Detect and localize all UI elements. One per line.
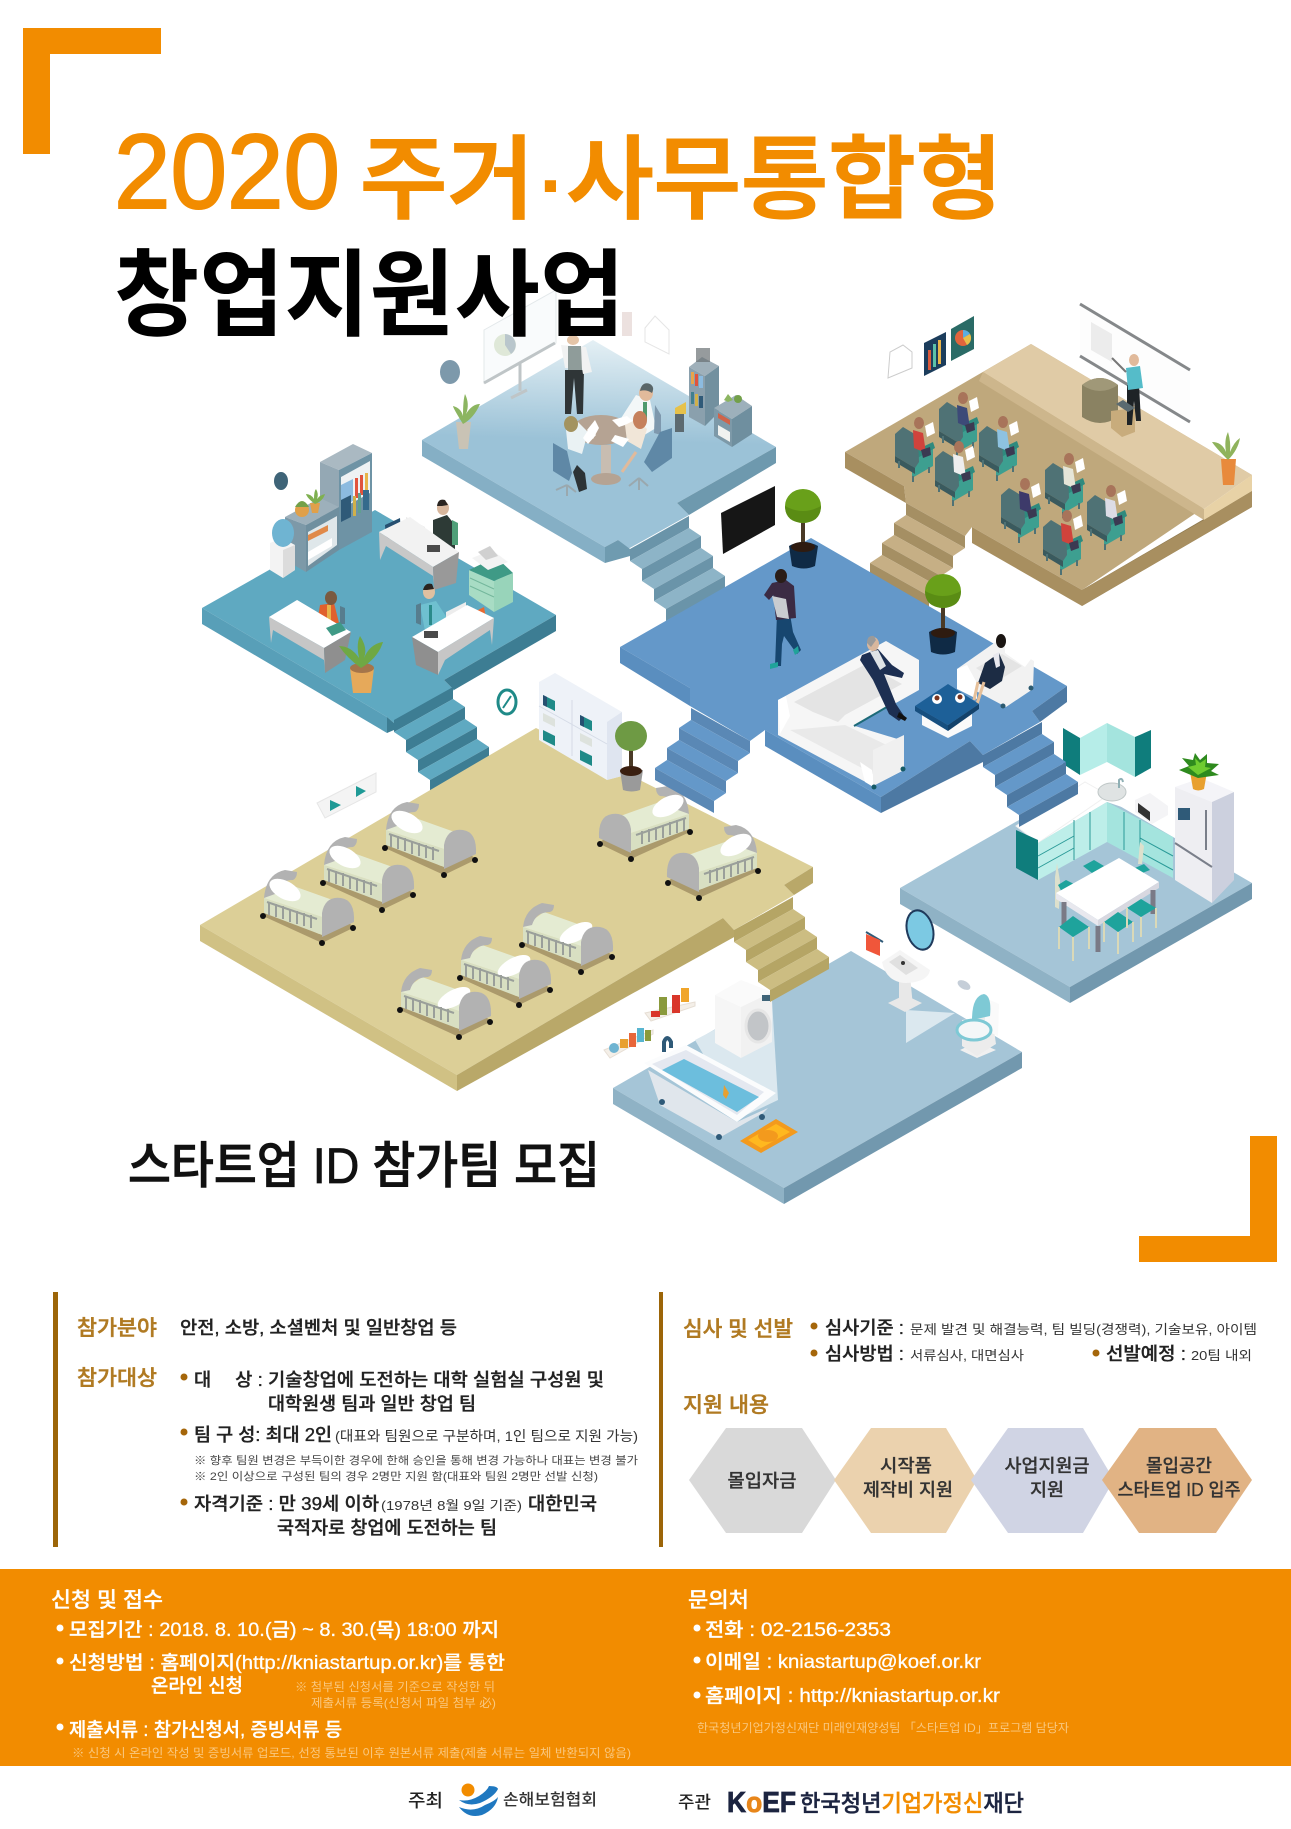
- microwave: [1135, 793, 1168, 824]
- room: meeting room: [422, 290, 776, 563]
- pale floor tiles: [695, 1000, 955, 1118]
- left desk with worker: [269, 591, 351, 673]
- icon: compass clock: [498, 690, 516, 714]
- hexagon: space: 몰입공간: [1146, 1456, 1212, 1476]
- text: criteria: 문제 발견 및 해결능력, 팀 빌딩(경쟁력), 기술보유, 아이템: [910, 1322, 1257, 1337]
- bullet: homepage: [694, 1692, 700, 1698]
- bullet: phone: [694, 1624, 700, 1632]
- hexagon: business grant: [971, 1428, 1114, 1533]
- text: selection: 20팀 내외: [1191, 1348, 1252, 1363]
- room: bathroom: [604, 907, 1022, 1204]
- sofa: [778, 641, 919, 790]
- text: qualification line 2: 국적자로 창업에 도전하는 팀: [277, 1518, 497, 1538]
- upper cabinets: [1063, 723, 1151, 777]
- stairs: dormitory to bathroom: [734, 897, 829, 1002]
- right desk with worker: [412, 584, 494, 675]
- panel: eligibility: [53, 1292, 638, 1547]
- tree back: [785, 489, 821, 568]
- panel: application band: [0, 1569, 1291, 1766]
- room: lounge: [620, 489, 1067, 813]
- room: kitchen: [900, 723, 1252, 1003]
- text: foundation name: 한국청년기업가정신재단: [800, 1790, 1024, 1816]
- dorm tree: [615, 721, 647, 792]
- text: documents: 제출서류 : 참가신청서, 증빙서류 등: [69, 1719, 342, 1741]
- man on sofa: [860, 636, 907, 721]
- whiteboard: [484, 290, 556, 398]
- coffee table: [915, 684, 979, 738]
- hexagon: funding: [689, 1428, 836, 1533]
- title line 1: [114, 113, 1003, 231]
- note 1: ※ 향후 팀원 변경은 부득이한 경우에 한해 승인을 통해 변경 가능하나 대표는 변경 불가: [194, 1453, 638, 1467]
- heading: target: 참가대상: [77, 1367, 157, 1390]
- title line 2: 창업지원사업: [114, 243, 625, 349]
- hexagon: business grant: 사업지원금: [1004, 1456, 1090, 1476]
- illustration: isometric floors: [200, 290, 1252, 1204]
- stairs: lounge to kitchen: [983, 722, 1078, 827]
- note: attachment line 2: 제출서류 등록(신청서 파일 첨부 必): [311, 1696, 496, 1710]
- lectern and presenter: [1082, 354, 1143, 437]
- bullet: qualification: [180, 1498, 188, 1506]
- refrigerator: [1175, 778, 1234, 903]
- hexagon: space: [1102, 1428, 1252, 1533]
- text: insurance association: 손해보험협회: [503, 1791, 597, 1809]
- hexagon: space: 스타트업 ID 입주: [1118, 1480, 1240, 1500]
- bullet: selection: [1092, 1350, 1100, 1356]
- subtitle: 스타트업 ID 참가팀 모집: [128, 1138, 600, 1194]
- faint wall frames: [622, 312, 669, 354]
- title line 1: 주거·사무통합형: [360, 130, 1003, 231]
- tree front: [925, 574, 961, 654]
- room: lecture hall: [845, 304, 1252, 606]
- text: method: 신청방법 : 홈페이지(http://kniastartup.or.kr)를 통한: [69, 1652, 505, 1674]
- bullet: method: [810, 1350, 818, 1356]
- bullet: criteria: [810, 1322, 818, 1330]
- text: target line 1: 대 상 : 기술창업에 도전하는 대학 실험실 구성원 및: [194, 1370, 604, 1390]
- towel: [866, 932, 883, 956]
- note 2: ※ 2인 이상으로 구성된 팀의 경우 2명만 지원 함(대표와 팀원 2명만 선발 신청): [194, 1470, 598, 1483]
- bathtub: [644, 1038, 776, 1140]
- projection screen: [1080, 304, 1190, 422]
- text: method label: 심사방법 :: [825, 1344, 904, 1364]
- logo: KoEF: KoEF: [727, 1787, 796, 1819]
- bullet: email: [694, 1656, 700, 1664]
- logo: insurance association: [459, 1784, 498, 1816]
- stairs: office to dormitory: [394, 687, 489, 792]
- armchair and woman: [957, 634, 1034, 708]
- wall clock: [274, 472, 288, 490]
- note: attachment line 1: ※ 첨부된 신청서를 기준으로 작성한 뒤: [295, 1680, 495, 1694]
- bullet: target: [180, 1374, 188, 1380]
- wall display shelf: [539, 673, 622, 780]
- room: dormitory: [200, 673, 813, 1091]
- bullet: team: [180, 1428, 188, 1436]
- counter and sink: [1016, 779, 1175, 843]
- bullet: documents: [56, 1724, 64, 1730]
- bath shelves: [604, 988, 695, 1058]
- text: method: 서류심사, 대면심사: [910, 1348, 1024, 1363]
- corner bracket: top left: [23, 28, 161, 154]
- heading: review: 심사 및 선발: [683, 1318, 793, 1341]
- heading: application: 신청 및 접수: [51, 1589, 163, 1612]
- large potted plant: [339, 636, 383, 693]
- text: criteria label: 심사기준 :: [825, 1318, 904, 1338]
- bullet: method: [56, 1658, 64, 1664]
- pedestal sink: [882, 950, 930, 1012]
- dining table: [1056, 858, 1159, 952]
- hexagon: prototype: 제작비 지원: [863, 1480, 953, 1500]
- text: period: 모집기간 : 2018. 8. 10.(금) ~ 8. 30.(목) 18:00 까지: [69, 1619, 499, 1641]
- wall charts: [888, 316, 974, 378]
- dining stools: [1059, 899, 1156, 961]
- text: method line 2: 온라인 신청: [151, 1675, 243, 1697]
- bath mat: [740, 1119, 798, 1153]
- text: qualification: 자격기준 : 만 39세 이하: [194, 1494, 379, 1514]
- text: team note: (대표와 팀원으로 구분하며, 1인 팀으로 지원 가능): [335, 1428, 638, 1444]
- label: host: 주최: [408, 1791, 443, 1811]
- sponsor: host organization: [678, 1787, 1024, 1819]
- round table with people: [553, 383, 672, 496]
- text: target line 2: 대학원생 팀과 일반 창업 팀: [268, 1394, 476, 1414]
- bullet: period: [56, 1624, 64, 1632]
- room: office: [202, 444, 556, 733]
- hexagon: prototype: [834, 1428, 977, 1533]
- text: field: 안전, 소방, 소셜벤처 및 일반창업 등: [180, 1318, 457, 1338]
- text: qualification date: (1978년 8월 9일 기준): [381, 1498, 522, 1513]
- label: sponsor: 주관: [678, 1793, 711, 1812]
- lower cabinets: [1016, 802, 1173, 880]
- walking man: [764, 569, 801, 669]
- toilet: [956, 978, 999, 1058]
- tall bookshelf: [320, 444, 372, 550]
- potted plant: [453, 394, 480, 449]
- low shelf: [285, 498, 339, 572]
- washing machine: [715, 980, 772, 1058]
- dining chairs: [1055, 842, 1150, 909]
- wall clock: [440, 360, 460, 384]
- panel: review and support: [659, 1292, 1257, 1547]
- text: homepage: 홈페이지 : http://kniastartup.or.kr: [705, 1685, 1001, 1707]
- title line 1: 2020: [114, 113, 340, 231]
- stage plant: [1212, 432, 1240, 485]
- hexagon: business grant: 지원: [1030, 1480, 1064, 1500]
- hexagon: funding: 몰입자금: [728, 1471, 796, 1491]
- bookshelves: [675, 348, 752, 447]
- text: qualification nationality: 대한민국: [528, 1494, 597, 1514]
- heading: contact: 문의처: [688, 1589, 749, 1612]
- small plants: [295, 489, 325, 517]
- corner bracket: bottom right: [1139, 1136, 1277, 1262]
- heading: support: 지원 내용: [683, 1394, 769, 1417]
- hexagon: prototype: 시작품: [880, 1456, 932, 1476]
- heading: field: 참가분야: [77, 1317, 157, 1340]
- plant on fridge: [1179, 753, 1219, 790]
- back desk with worker: [379, 500, 459, 590]
- host: organizer: [408, 1784, 597, 1816]
- printer: [469, 546, 513, 624]
- text: team: 팀 구 성: 최대 2인: [194, 1425, 332, 1445]
- wall mirror: [903, 907, 937, 953]
- text: phone: 전화 : 02-2156-2353: [705, 1619, 891, 1641]
- stairs: lounge to dormitory: [655, 708, 750, 813]
- text: selection label: 선발예정 :: [1106, 1344, 1186, 1364]
- beds: [260, 786, 761, 1040]
- stairs: meeting room to lounge: [630, 516, 725, 621]
- audience seats: [895, 392, 1127, 575]
- text: email: 이메일 : kniastartup@koef.or.kr: [705, 1651, 982, 1673]
- water cooler: [270, 519, 295, 578]
- note: documents: ※ 신청 시 온라인 작성 및 증빙서류 업로드, 선정 통보된 이후 원본서류 제출(제출 서류는 일체 반환되지 않음): [72, 1746, 631, 1760]
- stairs: lecture hall to lounge: [870, 503, 965, 608]
- standing presenter: [561, 335, 592, 414]
- icon: wall socket: [317, 773, 376, 818]
- wall TV: [721, 486, 775, 554]
- note: contact: 한국청년기업가정신재단 미래인재양성팀 「스타트업 ID」프로그램 담당자: [697, 1721, 1069, 1735]
